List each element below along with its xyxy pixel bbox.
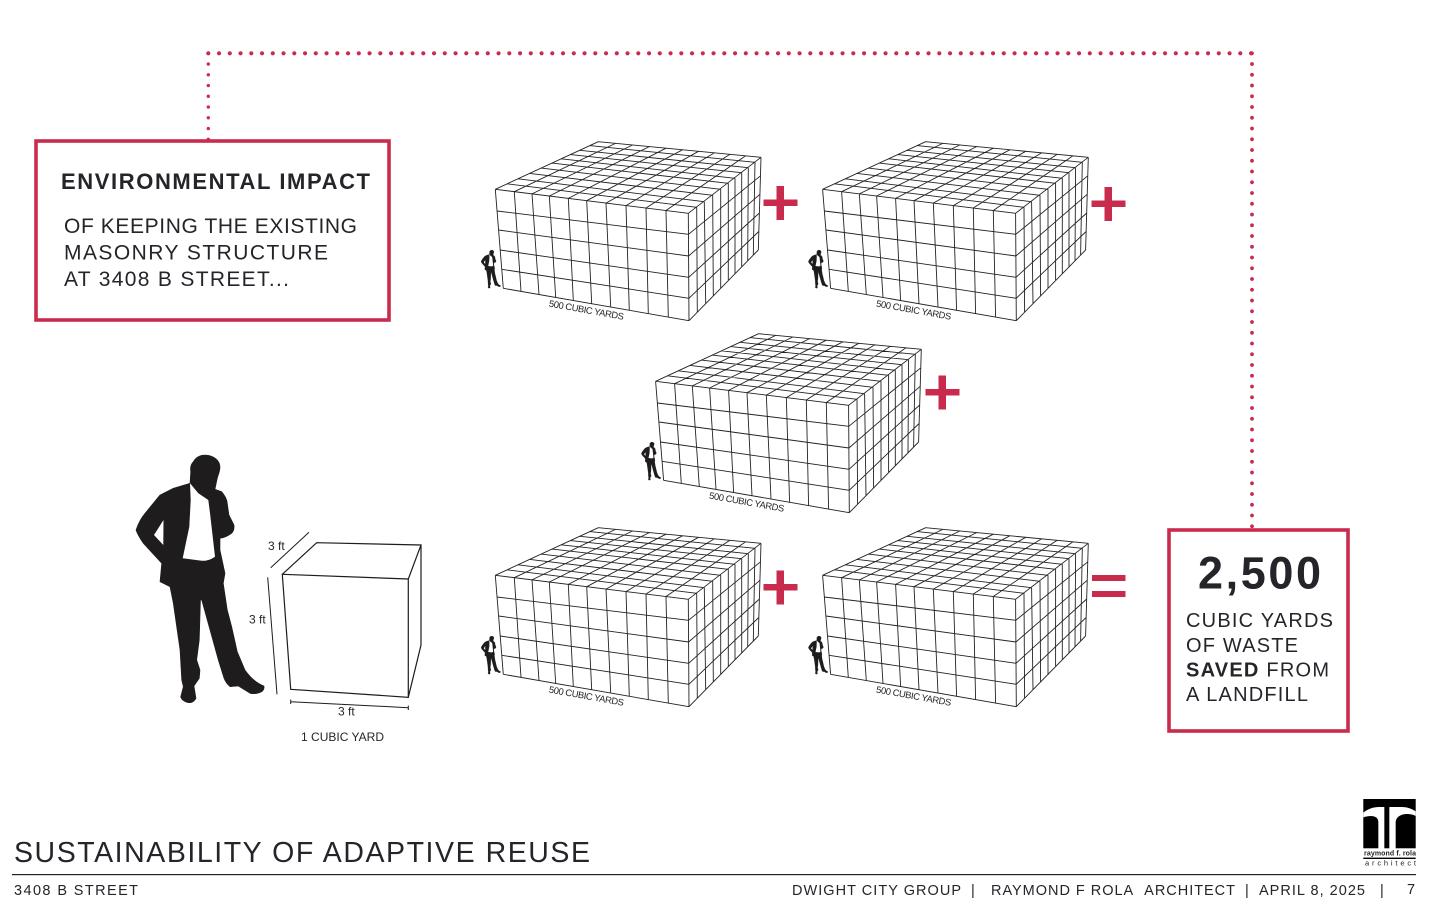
block: 500 cubic yards bottom left <box>481 528 761 708</box>
footer address: 3408 B STREET <box>14 883 138 899</box>
equals sign <box>1092 575 1126 597</box>
footer credits: | <box>1245 883 1249 899</box>
text block: waste saved: OF WASTE <box>1186 635 1298 657</box>
diagram: one cubic yard <box>249 532 421 744</box>
footer credits <box>792 882 1415 899</box>
diagram: one cubic yard: 3 ft <box>338 704 355 718</box>
footer credits: DWIGHT CITY GROUP <box>792 883 961 899</box>
plus sign 4 <box>764 570 798 604</box>
diagram: one cubic yard: 1 CUBIC YARD <box>301 730 384 744</box>
diagram: one cubic yard: 3 ft <box>249 612 266 626</box>
block: 500 cubic yards bottom left: 500 CUBIC YARDS <box>548 684 625 708</box>
panel: 2,500 cubic yards saved <box>1169 530 1348 731</box>
footer rule <box>12 874 1416 875</box>
text block: waste saved: SAVED FROM <box>1186 660 1329 682</box>
text block: waste saved: CUBIC YARDS <box>1186 610 1333 632</box>
block: 500 cubic yards top right <box>808 142 1088 322</box>
plus sign 3 <box>926 376 960 410</box>
plus sign 1 <box>764 186 798 220</box>
block: 500 cubic yards bottom right <box>808 528 1088 708</box>
logo: architect <box>1365 858 1417 868</box>
block: 500 cubic yards top right: 500 CUBIC YARDS <box>875 298 952 322</box>
dotted connector <box>208 53 1252 528</box>
block: 500 cubic yards top left: 500 CUBIC YARDS <box>548 298 625 322</box>
text block: existing masonry structure <box>64 215 357 291</box>
footer credits: 7 <box>1407 882 1415 898</box>
panel: environmental impact <box>36 141 389 320</box>
footer credits: | <box>1380 883 1384 899</box>
plus sign 2 <box>1092 187 1126 221</box>
footer credits: | <box>971 883 975 899</box>
block: 500 cubic yards top left <box>481 142 761 322</box>
text block: waste saved: A LANDFILL <box>1186 684 1308 706</box>
text block: existing masonry structure: OF KEEPING THE EXISTING <box>64 215 357 238</box>
block: 500 cubic yards bottom right: 500 CUBIC YARDS <box>875 684 952 708</box>
icon: standing man silhouette <box>136 455 264 703</box>
text block: waste saved <box>1186 610 1333 706</box>
logo: raymond f. rola <box>1364 850 1416 858</box>
text block: existing masonry structure: MASONRY STRUCTURE <box>64 242 328 264</box>
diagram: one cubic yard: 3 ft <box>268 539 285 553</box>
big number: 2,500 <box>1198 548 1321 598</box>
logo <box>1363 799 1417 868</box>
block: 500 cubic yards middle <box>641 334 921 514</box>
text block: existing masonry structure: AT 3408 B STREET... <box>64 268 289 291</box>
footer credits: RAYMOND F ROLA ARCHITECT <box>991 883 1235 899</box>
footer credits: APRIL 8, 2025 <box>1259 883 1365 899</box>
block: 500 cubic yards middle: 500 CUBIC YARDS <box>708 490 785 514</box>
title: SUSTAINABILITY OF ADAPTIVE REUSE <box>14 837 590 869</box>
heading: environmental impact: ENVIRONMENTAL IMPACT <box>61 169 371 194</box>
